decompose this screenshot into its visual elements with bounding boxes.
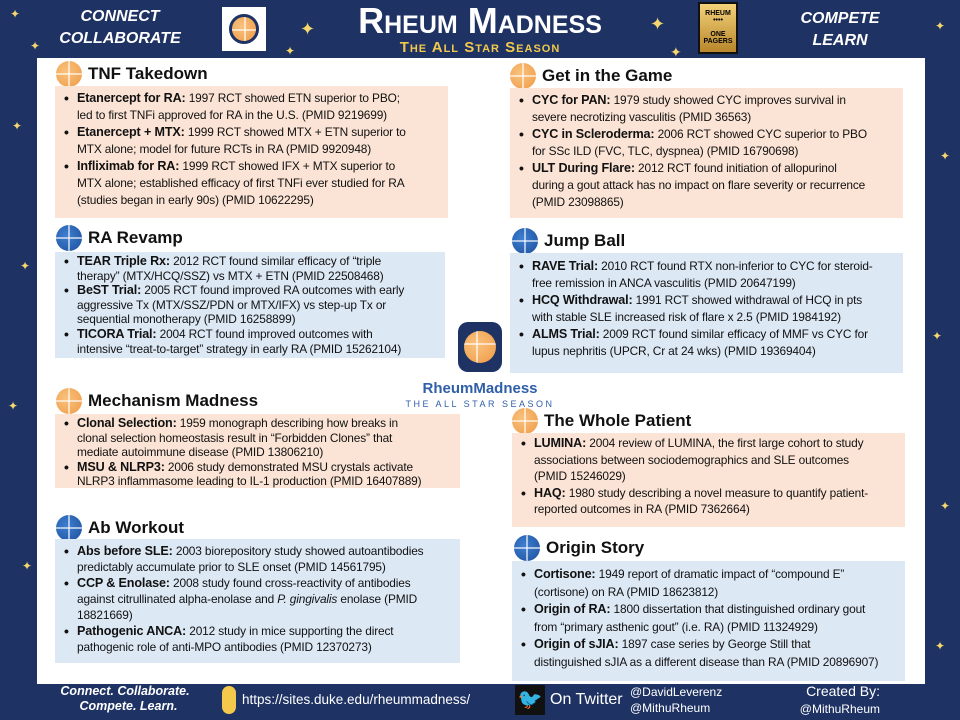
panel: Origin Story: (cortisone) on RA (PMID 18623812) [534, 584, 718, 598]
panel: Origin Story: Cortisone: 1949 report of dramatic impact of “compound E” [534, 567, 844, 581]
icon: mouse [222, 686, 236, 714]
text: ✦ [670, 44, 682, 60]
panel: Origin Story: distinguished sJIA as a different disease than RA (PMID 20896907) [534, 654, 878, 668]
icon: one pagers: RHEUM [705, 10, 731, 17]
panel: Jump Ball: HCQ Withdrawal: 1991 RCT showed withdrawal of HCQ in pts [532, 293, 862, 307]
panel: RA Revamp: intensive “treat-to-target” strategy in early RA (PMID 15262104) [77, 342, 401, 356]
heading: Ab Workout [56, 515, 184, 539]
text: ✦ [940, 149, 950, 163]
panel: RA Revamp: TEAR Triple Rx: 2012 RCT found similar efficacy of “triple [77, 254, 381, 268]
panel: Get in the Game: ULT During Flare: 2012 RCT found initiation of allopurinol [532, 161, 837, 175]
panel: TNF Takedown: (studies began in early 90s) (PMID 10622295) [77, 193, 314, 207]
text: ✦ [940, 499, 950, 513]
panel: RA Revamp [55, 252, 445, 358]
panel: Mechanism Madness [55, 414, 460, 488]
panel: Ab Workout: Pathogenic ANCA: 2012 study in mice supporting the direct [77, 624, 393, 638]
panel: Mechanism Madness: MSU & NLRP3: 2006 study demonstrated MSU crystals activate [77, 460, 413, 474]
heading: Jump Ball [512, 228, 625, 253]
title: The All Star Season [400, 39, 560, 56]
panel: Ab Workout: predictably accumulate prior to SLE onset (PMID 14561795) [77, 560, 386, 574]
header: compete learn: COMPETE [800, 10, 880, 27]
panel: Get in the Game: CYC for PAN: 1979 study showed CYC improves survival in [532, 93, 846, 107]
panel: Jump Ball: lupus nephritis (UPCR, Cr at 24 wks) (PMID 19369404) [532, 344, 816, 358]
footer: created by [800, 683, 880, 716]
panel: TNF Takedown: Infliximab for RA: 1999 RCT showed IFX + MTX superior to [77, 159, 395, 173]
panel: Ab Workout [55, 539, 460, 663]
text: ✦ [12, 119, 22, 133]
header: connect collaborate: CONNECT [80, 8, 160, 25]
footer: created by: Created By: [806, 683, 880, 699]
text: ✦ [650, 14, 665, 34]
header: compete learn [800, 10, 880, 49]
center logo [405, 322, 555, 409]
icon: twitter [515, 685, 545, 715]
center logo: THE ALL STAR SEASON [405, 399, 555, 409]
footer: url: https://sites.duke.edu/rheummadness/ [242, 692, 470, 707]
icon: one pagers: •••• [713, 17, 723, 24]
panel: TNF Takedown: Etanercept for RA: 1997 RCT showed ETN superior to PBO; [77, 91, 400, 105]
heading: Get in the Game: Get in the Game [542, 66, 672, 85]
title: Rheum Madness [358, 0, 602, 41]
panel: Origin Story: Origin of RA: 1800 dissertation that distinguished ordinary gout [534, 602, 865, 616]
panel: Ab Workout: CCP & Enolase: 2008 study found cross-reactivity of antibodies [77, 576, 411, 590]
panel: Jump Ball: free remission in ANCA vasculitis (PMID 20647199) [532, 276, 796, 290]
footer: tagline [60, 684, 190, 713]
icon: one pagers [698, 2, 738, 54]
center logo: RheumMadness [422, 380, 538, 397]
panel: Jump Ball: ALMS Trial: 2009 RCT found similar efficacy of MMF vs CYC for [532, 327, 868, 341]
panel: Get in the Game: (PMID 23098865) [532, 195, 624, 209]
panel: Ab Workout: Abs before SLE: 2003 biorepository study showed autoantibodies [77, 544, 423, 558]
heading: TNF Takedown [56, 61, 208, 86]
panel: The Whole Patient: reported outcomes in RA (PMID 7362664) [534, 502, 750, 516]
panel: Mechanism Madness: clonal selection homeostasis result in “Forbidden Clones” that [77, 431, 392, 445]
panel: Jump Ball: with stable SLE increased risk of flare x 2.5 (PMID 1984192) [532, 310, 841, 324]
text: @MithuRheum [630, 701, 710, 715]
panel: The Whole Patient: (PMID 15246029) [534, 469, 626, 483]
heading: RA Revamp [56, 225, 183, 251]
panel: The Whole Patient: associations between sociodemographics and SLE outcomes [534, 452, 849, 466]
panel: The Whole Patient: HAQ: 1980 study describing a novel measure to quantify patient- [534, 486, 868, 500]
footer: tagline: Connect. Collaborate. [60, 684, 190, 698]
panel: Mechanism Madness: Clonal Selection: 1959 monograph describing how breaks in [77, 416, 398, 430]
text: ✦ [300, 19, 315, 39]
panel: Get in the Game [510, 88, 903, 218]
panel: RA Revamp: therapy” (MTX/HCQ/SSZ) vs MTX + ETN (PMID 22508468) [77, 269, 384, 283]
panel: Origin Story: Origin of sJIA: 1897 case series by George Still that [534, 637, 810, 651]
icon: one pagers: ONE PAGERS [703, 31, 733, 45]
footer: twitter: On Twitter [550, 691, 623, 708]
heading: TNF Takedown: TNF Takedown [88, 64, 208, 83]
panel: RA Revamp: sequential monotherapy (PMID 16258899) [77, 312, 295, 326]
heading: Mechanism Madness: Mechanism Madness [88, 391, 258, 410]
heading: Origin Story: Origin Story [546, 538, 644, 557]
header: connect collaborate [59, 8, 182, 47]
panel: Ab Workout: against citrullinated alpha-enolase and P. gingivalis enolase (PMID [77, 592, 417, 606]
panel: RA Revamp: BeST Trial: 2005 RCT found improved RA outcomes with early [77, 283, 404, 297]
panel: Ab Workout: pathogenic role of anti-MPO antibodies (PMID 12370273) [77, 640, 372, 654]
panel: TNF Takedown: led to first TNFi approved for RA in the U.S. (PMID 9219699) [77, 108, 387, 122]
text: ✦ [22, 559, 32, 573]
icon: logo left [222, 7, 266, 51]
panel: Get in the Game: CYC in Scleroderma: 2006 RCT showed CYC superior to PBO [532, 127, 867, 141]
heading: Ab Workout: Ab Workout [88, 518, 184, 537]
panel: TNF Takedown: Etanercept + MTX: 1999 RCT showed MTX + ETN superior to [77, 125, 406, 139]
panel: The Whole Patient [512, 433, 905, 527]
panel: Ab Workout: 18821669) [77, 608, 133, 622]
panel: Get in the Game: for SSc ILD (FVC, TLC, dyspnea) (PMID 16790698) [532, 144, 798, 158]
text: ✦ [935, 639, 945, 653]
panel: RA Revamp: TICORA Trial: 2004 RCT found improved outcomes with [77, 327, 373, 341]
panel: Get in the Game: during a gout attack has no impact on flare severity or recurrence [532, 178, 865, 192]
heading: RA Revamp: RA Revamp [88, 228, 183, 247]
panel: Origin Story: from “primary asthenic gout” (i.e. RA) (PMID 11324929) [534, 620, 818, 634]
panel: TNF Takedown: MTX alone; model for future RCTs in RA (PMID 9920948) [77, 142, 371, 156]
heading: The Whole Patient: The Whole Patient [544, 411, 691, 430]
panel: TNF Takedown [55, 86, 448, 218]
heading: Origin Story [514, 535, 644, 561]
header: connect collaborate: COLLABORATE [59, 30, 181, 47]
footer: tagline: Compete. Learn. [79, 699, 177, 713]
panel: Jump Ball [510, 253, 903, 373]
heading: Mechanism Madness [56, 388, 258, 414]
panel: Mechanism Madness: NLRP3 inflammasome leading to IL-1 production (PMID 16407889) [77, 474, 421, 488]
panel: Origin Story [512, 561, 905, 681]
heading: The Whole Patient [512, 408, 692, 433]
heading: Get in the Game [510, 63, 672, 88]
panel: Mechanism Madness: mediate autoimmune disease (PMID 13806210) [77, 445, 323, 459]
panel: Jump Ball: RAVE Trial: 2010 RCT found RTX non-inferior to CYC for steroid- [532, 259, 873, 273]
text: ✦ [935, 19, 945, 33]
panel: RA Revamp: aggressive Tx (MTX/SSZ/PDN or MTX/IFX) vs step-up Tx or [77, 298, 386, 312]
text: ✦ [8, 399, 18, 413]
text: ✦ [932, 329, 942, 343]
panel: The Whole Patient: LUMINA: 2004 review of LUMINA, the first large cohort to study [534, 436, 863, 450]
panel: TNF Takedown: MTX alone; established efficacy of first TNFi ever studied for RA [77, 176, 405, 190]
footer: created by: @MithuRheum [800, 702, 880, 716]
text: ✦ [20, 259, 30, 273]
text: ✦ [30, 39, 40, 53]
heading: Jump Ball: Jump Ball [544, 231, 625, 250]
header: compete learn: LEARN [812, 32, 868, 49]
stars decoration: ✦ [10, 7, 20, 21]
icon: twitter: 🐦 [518, 689, 542, 711]
panel: Get in the Game: severe necrotizing vasculitis (PMID 36563) [532, 110, 751, 124]
text: ✦ [285, 44, 295, 58]
text: @DavidLeverenz [630, 685, 722, 699]
